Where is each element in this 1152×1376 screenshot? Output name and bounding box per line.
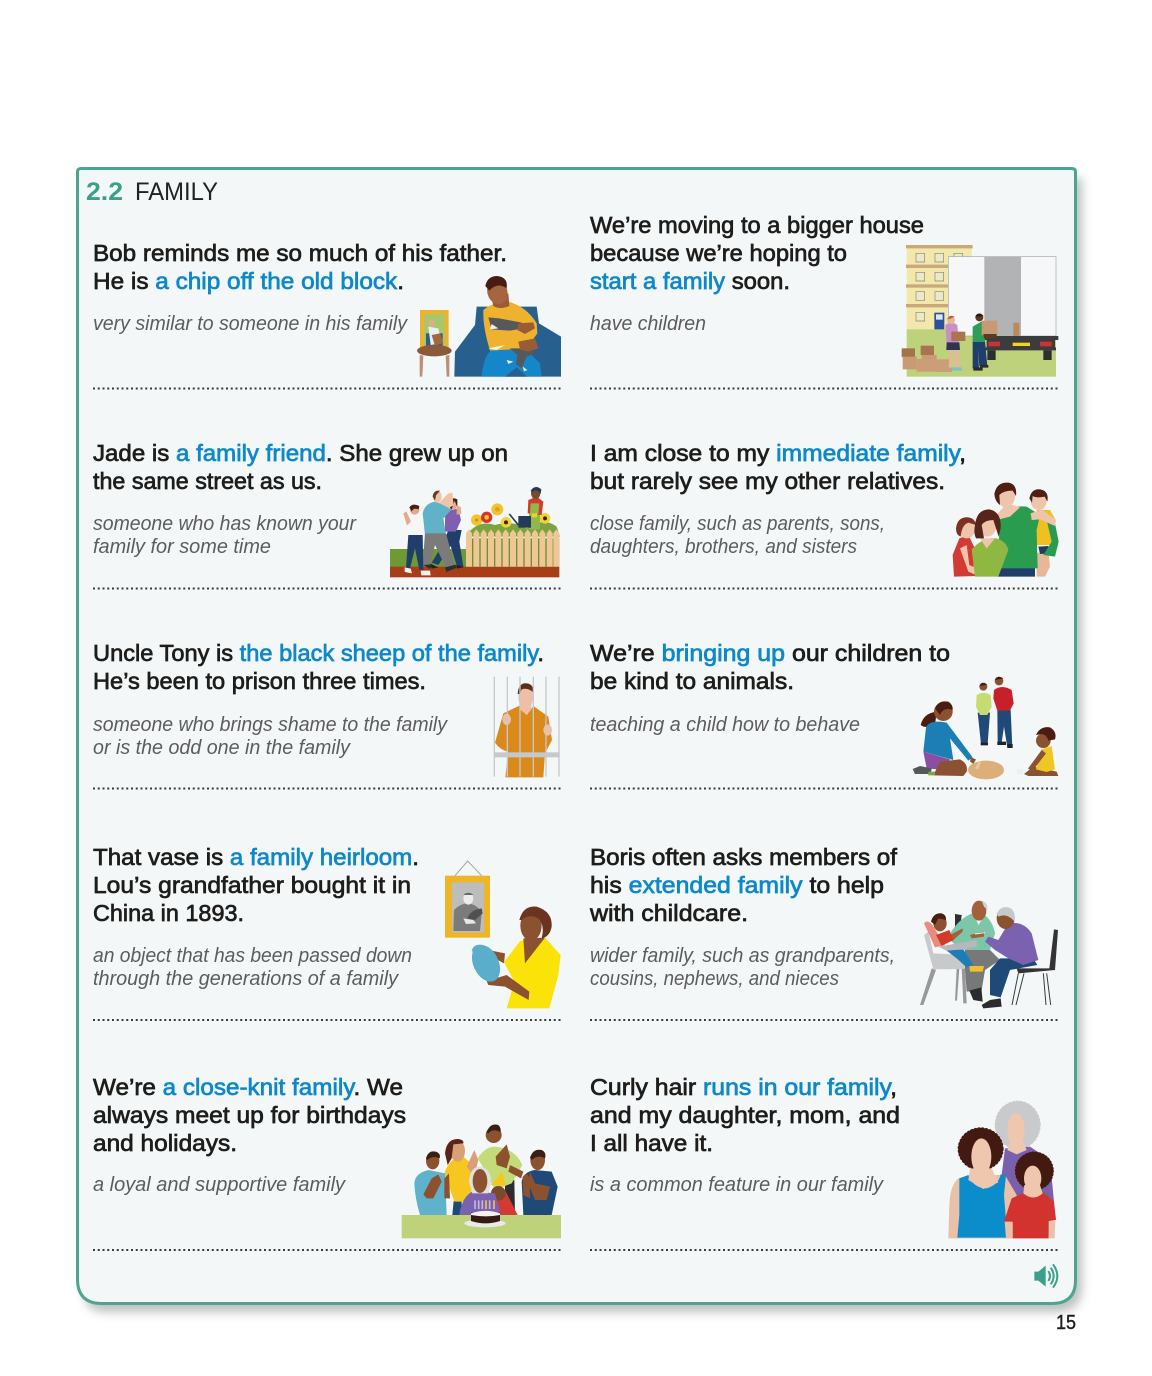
text block: the black sheep of the family: Uncle Tony is the black sheep of the family . <box>93 640 544 666</box>
text block: immediate family: I am close to my immediate family , <box>590 440 966 466</box>
text block: bringing up: be kind to animals. <box>590 668 794 694</box>
text block: runs in our family: Curly hair runs in our family , <box>590 1074 897 1100</box>
illustration: woman holding vase below framed portrait <box>445 861 561 1008</box>
section heading: FAMILY <box>135 178 218 206</box>
illustration: man in orange behind prison bars <box>494 677 560 777</box>
text block: runs in our family: is a common feature in our family <box>590 1173 885 1196</box>
text block: a chip off the old block <box>93 240 507 335</box>
text block: immediate family <box>590 440 966 558</box>
text block: runs in our family: and my daughter, mom, and <box>590 1102 900 1128</box>
text block: a family friend: the same street as us. <box>93 468 322 494</box>
text block: the black sheep of the family: He’s been to prison three times. <box>93 668 426 694</box>
illustration: family loading a moving truck <box>902 245 1058 377</box>
text block: runs in our family <box>590 1074 900 1196</box>
text block: immediate family: close family, such as parents, sons, <box>590 512 885 535</box>
illustration: family celebrating birthday around a cake <box>402 1124 561 1238</box>
text block: a family friend: Jade is a family friend . She grew up on <box>93 440 508 466</box>
panel: family vocabulary <box>78 168 1082 1312</box>
icon: audio speaker <box>1034 1264 1057 1288</box>
text block: extended family: with childcare. <box>589 900 748 926</box>
illustration: grandparents and child at a table <box>920 901 1058 1008</box>
text block: immediate family: but rarely see my other relatives. <box>590 468 945 494</box>
text block: extended family: wider family, such as grandparents, <box>590 944 895 967</box>
text block: a family heirloom: That vase is a family heirloom . <box>93 844 419 870</box>
text block: a family friend <box>93 440 508 558</box>
text block: extended family: his extended family to help <box>590 872 884 898</box>
text block: the black sheep of the family: someone who brings shame to the family <box>93 713 449 736</box>
text block: a family friend: family for some time <box>93 535 271 558</box>
text block: extended family: Boris often asks members of <box>590 844 898 870</box>
section heading <box>86 178 218 206</box>
text block: a chip off the old block: very similar to someone in his family <box>93 312 409 335</box>
illustration: parents watching children with a rabbit <box>913 677 1058 779</box>
text block: bringing up: We’re bringing up our children to <box>590 640 950 666</box>
text block: a family heirloom: Lou’s grandfather bought it in <box>93 872 411 898</box>
text block: the black sheep of the family <box>93 640 544 759</box>
text block: a family heirloom: through the generations of a family <box>93 967 400 990</box>
text block: runs in our family: I all have it. <box>590 1130 713 1156</box>
text block: a family friend: someone who has known your <box>93 512 357 535</box>
text block: a chip off the old block: Bob reminds me so much of his father. <box>93 240 507 266</box>
text block: a close-knit family: always meet up for birthdays <box>93 1102 406 1128</box>
text block: the black sheep of the family: or is the odd one in the family <box>93 736 352 759</box>
text block: extended family: cousins, nephews, and nieces <box>590 967 839 990</box>
illustration: man holding cat beside framed photo <box>417 276 561 377</box>
text block: start a family: because we’re hoping to <box>590 240 847 266</box>
text block: bringing up <box>590 640 950 736</box>
page number: 15 <box>1056 1312 1076 1334</box>
text block: a chip off the old block: He is a chip off the old block . <box>93 268 404 294</box>
illustration: three generations with curly hair <box>948 1102 1056 1238</box>
text block: a family heirloom <box>93 844 419 990</box>
illustration: family walking past a neighbour's garden fence <box>390 487 560 577</box>
text block: a close-knit family: and holidays. <box>93 1130 237 1156</box>
text block: start a family: have children <box>590 312 706 335</box>
section heading: 2.2 <box>86 178 123 206</box>
text block: a family heirloom: China in 1893. <box>93 900 244 926</box>
text block: a close-knit family <box>93 1074 406 1196</box>
text block: a close-knit family: a loyal and supportive family <box>93 1173 347 1196</box>
text block: a close-knit family: We’re a close-knit family . We <box>93 1074 403 1100</box>
text block: bringing up: teaching a child how to behave <box>590 713 860 736</box>
illustration: parents with two children <box>953 483 1059 577</box>
text block: start a family <box>590 212 924 335</box>
text block: start a family: start a family soon. <box>590 268 790 294</box>
text block: a family heirloom: an object that has been passed down <box>93 944 412 967</box>
text block: extended family <box>589 844 898 990</box>
text block: immediate family: daughters, brothers, and sisters <box>590 535 857 558</box>
text block: start a family: We’re moving to a bigger house <box>590 212 924 238</box>
